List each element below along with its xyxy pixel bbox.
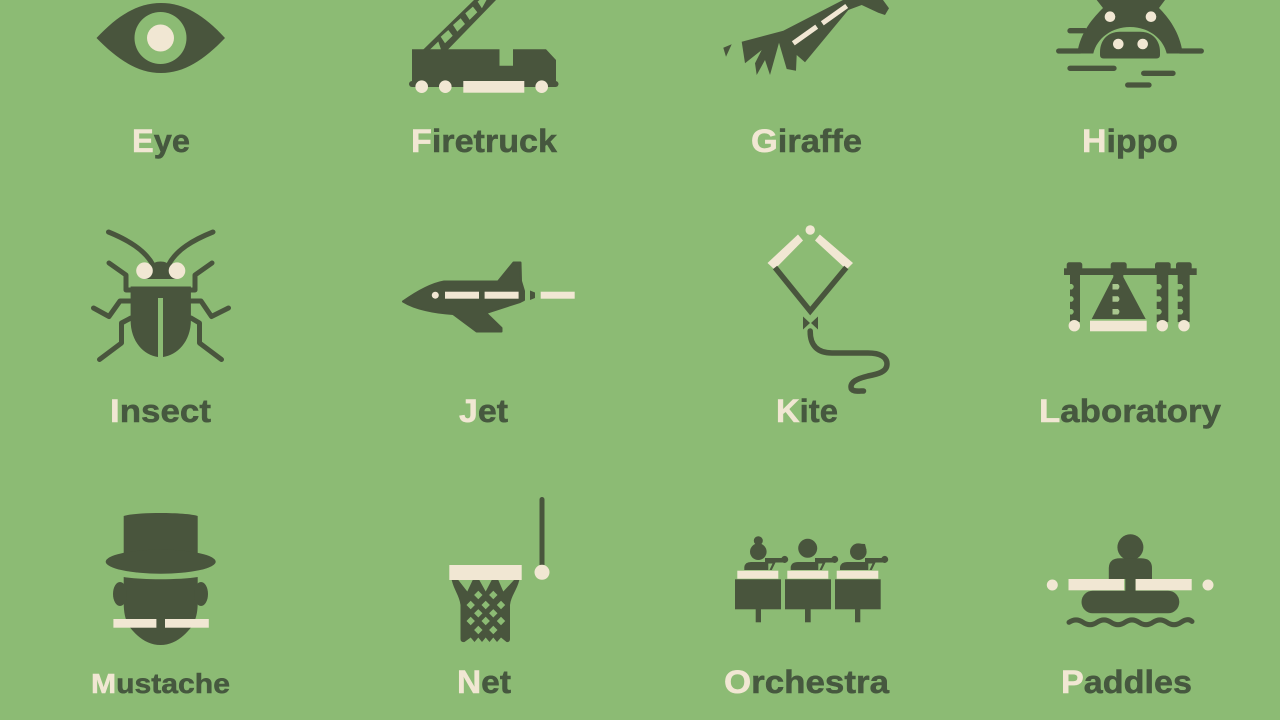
icon: paddler in boat xyxy=(1047,534,1214,625)
label: Laboratory: Laboratory xyxy=(1039,393,1221,429)
panel: Firetruck xyxy=(409,0,558,159)
panel: Jet xyxy=(403,262,575,429)
icon: basketball net xyxy=(449,500,550,642)
panel: Laboratory xyxy=(1039,262,1221,429)
icon: laboratory xyxy=(1064,262,1197,331)
icon: firetruck xyxy=(409,0,558,93)
label: Jet: Jet xyxy=(459,393,508,429)
panel: Paddles xyxy=(1047,534,1214,700)
icon: kite xyxy=(768,225,887,391)
panel: Hippo xyxy=(1059,0,1201,159)
panel: Mustache xyxy=(91,513,230,699)
label: Mustache: Mustache xyxy=(91,668,230,699)
panel: Giraffe xyxy=(723,0,889,159)
panel: Insect xyxy=(94,232,228,429)
label: Insect: Insect xyxy=(110,393,211,429)
label: Hippo: Hippo xyxy=(1082,123,1178,159)
icon: giraffe xyxy=(723,0,889,75)
label: Firetruck: Firetruck xyxy=(411,123,557,159)
panel: Kite xyxy=(768,225,887,429)
icon: orchestra xyxy=(735,536,888,622)
label: Net: Net xyxy=(457,664,511,700)
icon: eye xyxy=(96,3,225,73)
icon: jet xyxy=(403,262,575,332)
icon: mustache man xyxy=(106,513,216,645)
label: Giraffe: Giraffe xyxy=(751,123,862,159)
label: Kite: Kite xyxy=(776,393,838,429)
panel: Eye xyxy=(96,3,225,159)
label: Orchestra: Orchestra xyxy=(724,664,889,700)
label: Eye: Eye xyxy=(132,123,190,159)
icon: hippo xyxy=(1059,0,1201,85)
panel: Net xyxy=(449,500,550,700)
label: Paddles: Paddles xyxy=(1061,664,1192,700)
panel: Orchestra xyxy=(724,536,889,700)
icon: insect xyxy=(94,232,228,360)
